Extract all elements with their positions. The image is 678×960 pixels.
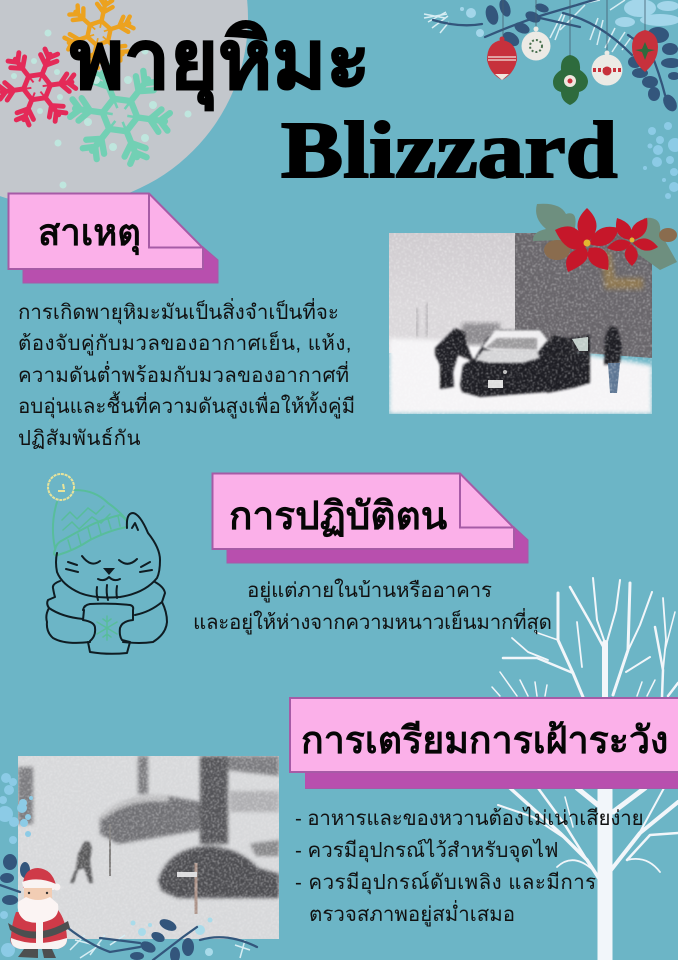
heading tab: causes xyxy=(8,192,218,284)
photo: pedestrian in snowfall xyxy=(18,756,279,939)
heading bar: precautions: การเตรียมการเฝ้าระวัง xyxy=(301,719,668,761)
title xyxy=(70,15,618,195)
text block: causes: ปฏิสัมพันธ์กัน xyxy=(18,427,141,450)
heading tab: causes: สาเหตุ xyxy=(38,212,141,253)
heading tab: what to do xyxy=(212,472,528,564)
text block: precautions: - ควรมีอุปกรณ์ไว้สำหรับจุดไฟ xyxy=(295,839,559,862)
heading bar: precautions xyxy=(289,697,678,789)
title: Blizzard xyxy=(281,107,617,195)
text block: causes: ต้องจับคู่กับมวลของอากาศเย็น, แห้ง, xyxy=(18,332,352,355)
text block: precautions: ตรวจสภาพอยู่สม่ำเสมอ xyxy=(309,903,515,926)
text block: precautions: - อาหารและของหวานต้องไม่เน่าเสียง่าย xyxy=(295,807,643,830)
photo: people pushing car in blizzard xyxy=(389,233,652,414)
text block: causes: การเกิดพายุหิมะมันเป็นสิ่งจำเป็นที่จะ xyxy=(18,301,339,324)
text block: what to do: อยู่แต่ภายในบ้านหรืออาคาร xyxy=(247,579,492,602)
heading tab: what to do: การปฏิบัติตน xyxy=(229,495,447,538)
text block: precautions: - ควรมีอุปกรณ์ดับเพลิง และมีการ xyxy=(295,871,597,894)
text block: what to do xyxy=(193,578,552,634)
background gray circle xyxy=(0,0,248,206)
title: พายุหิมะ xyxy=(70,15,370,106)
text block: causes: ความดันต่ำพร้อมกับมวลของอากาศที่ xyxy=(18,364,349,387)
text block: precautions xyxy=(295,806,643,926)
text block: causes xyxy=(18,298,355,450)
text block: what to do: และอยู่ให้ห่างจากความหนาวเย็นมากที่สุด xyxy=(193,611,552,634)
text block: causes: อบอุ่นและชื้นที่ความดันสูงเพื่อให้ทั้งคู่มี xyxy=(18,395,355,418)
